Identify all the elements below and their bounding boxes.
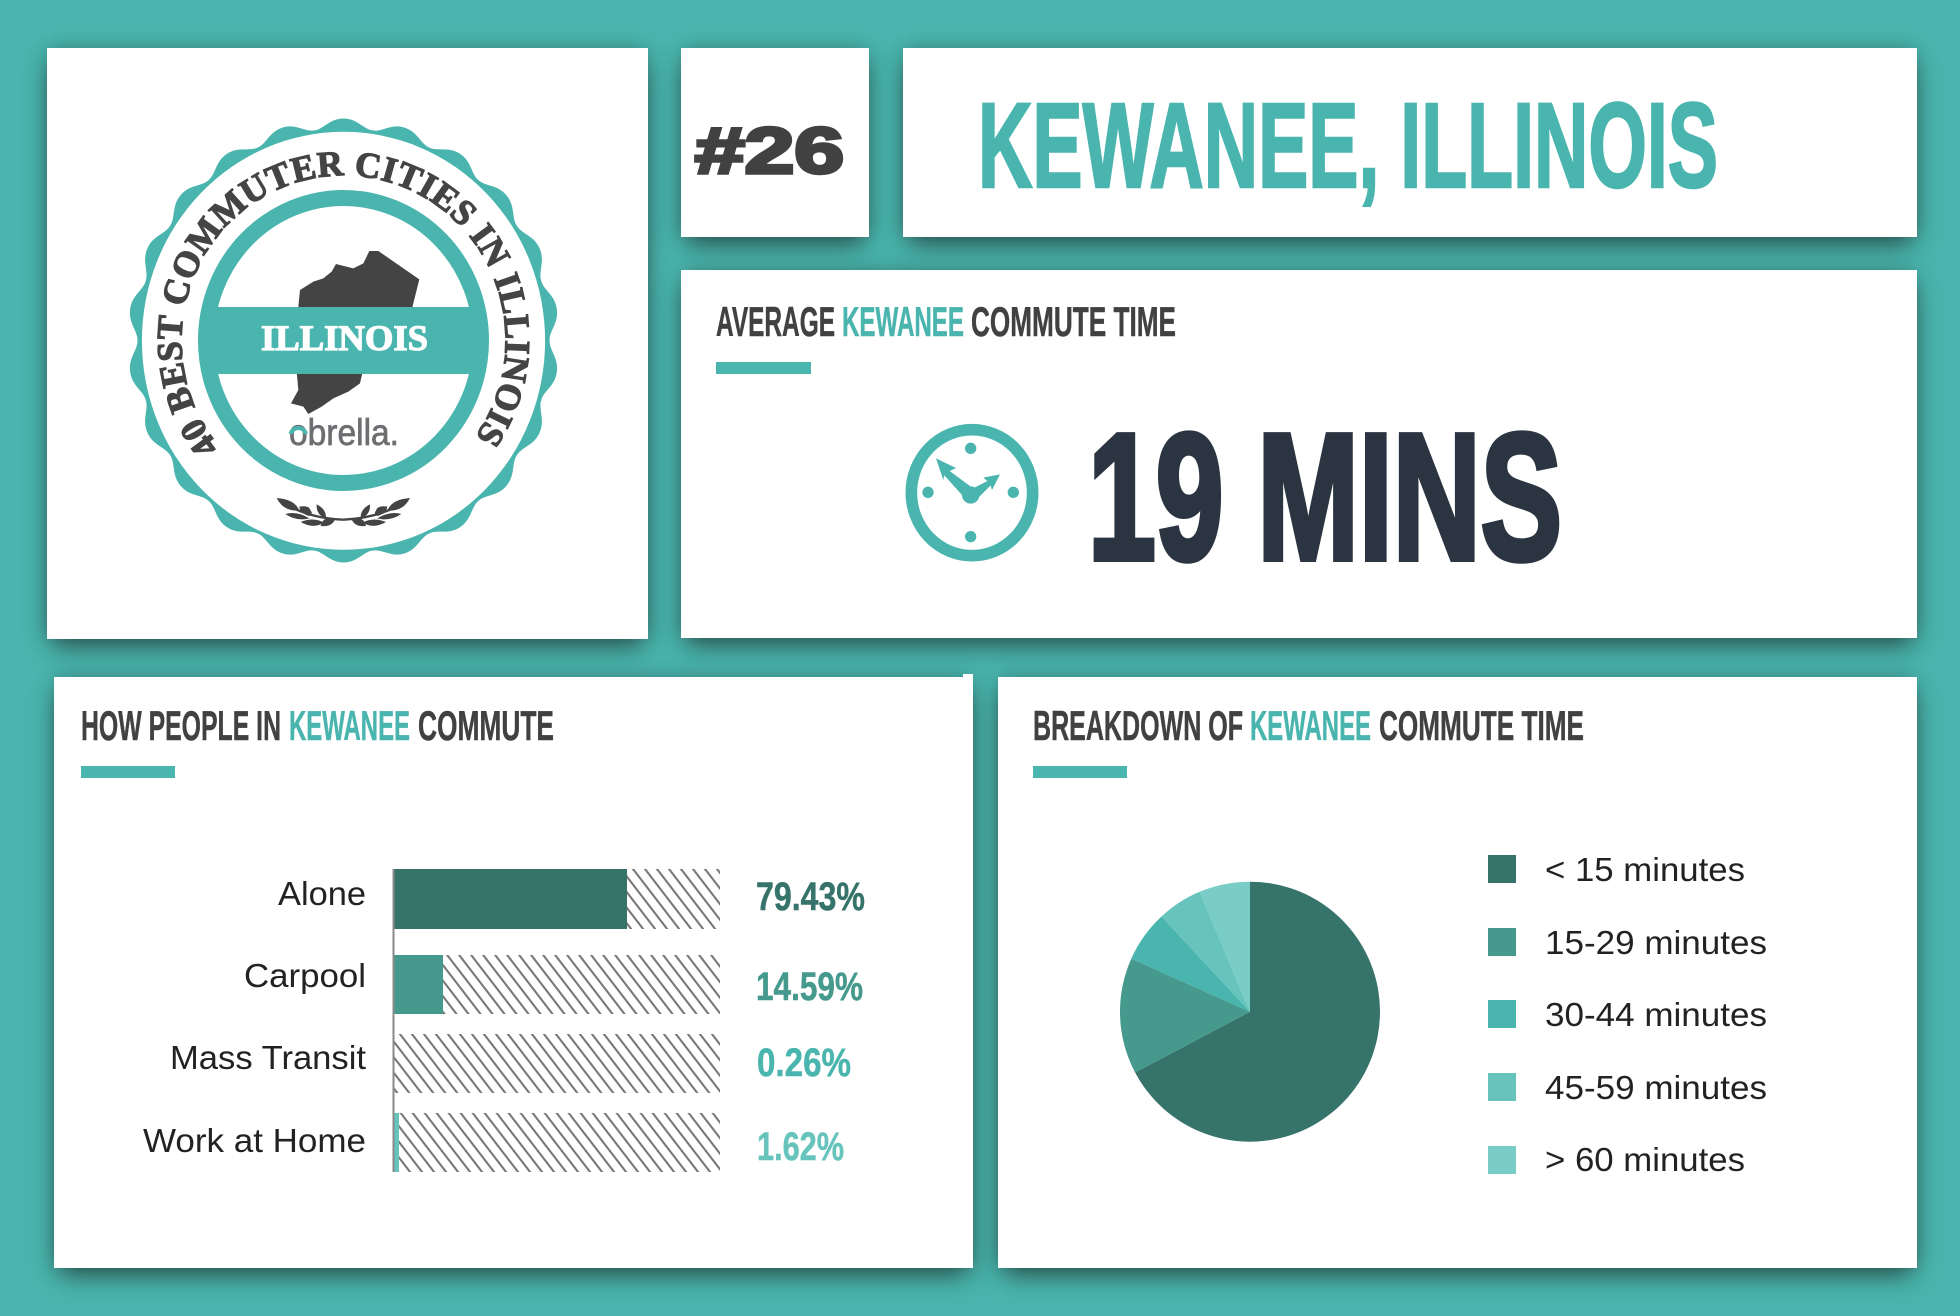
- heading: AVERAGE: [716, 298, 835, 345]
- heading: [716, 298, 1176, 345]
- row: Mass Transit: [170, 1034, 851, 1093]
- banner text: ILLINOIS: [261, 318, 428, 358]
- row: Alone: 79.43%: [756, 875, 865, 919]
- heading: COMMUTE TIME: [971, 298, 1176, 345]
- row: Carpool: [244, 955, 863, 1014]
- badge seal: [130, 118, 558, 562]
- row: Work at Home: [143, 1113, 844, 1172]
- row: Alone: Alone: [278, 875, 366, 912]
- notch: [963, 674, 973, 678]
- logo: obrella.: [289, 412, 399, 453]
- Illinois map: [291, 251, 419, 414]
- laurel: [277, 498, 410, 526]
- legend: 15-29 minutes: [1545, 924, 1767, 961]
- rank number: #26: [695, 114, 844, 187]
- heading accent: [716, 362, 811, 374]
- heading accent: [81, 766, 175, 778]
- inner ring: [206, 198, 481, 483]
- panel: average commute time: [681, 270, 1917, 638]
- heading accent: [1033, 766, 1127, 778]
- panel: title: [903, 48, 1917, 237]
- row: Mass Transit: 0.26%: [757, 1041, 851, 1085]
- big number: 19 MINS: [1088, 397, 1562, 598]
- row: Work at Home: 1.62%: [757, 1125, 844, 1169]
- legend: > 60 minutes: [1545, 1141, 1745, 1178]
- panel: commute time breakdown: [998, 677, 1917, 1268]
- bar chart: [143, 869, 865, 1172]
- panel: rank: [681, 48, 869, 237]
- legend: 30-44 minutes: [1545, 996, 1767, 1033]
- banner: [212, 307, 475, 374]
- heading: COMMUTE: [418, 702, 554, 749]
- legend: < 15 minutes: [1545, 851, 1745, 888]
- row: Mass Transit: Mass Transit: [170, 1039, 366, 1076]
- heading: KEWANEE: [1250, 702, 1371, 749]
- heading: HOW PEOPLE IN: [81, 702, 281, 749]
- heading: BREAKDOWN OF: [1033, 702, 1243, 749]
- legend: [1488, 851, 1767, 1178]
- heading: KEWANEE: [842, 298, 964, 345]
- icon: clock: [911, 430, 1033, 556]
- scalloped outer edge: [126, 119, 561, 562]
- row: Carpool: 14.59%: [756, 965, 863, 1009]
- row: Alone: [278, 869, 865, 929]
- row: Carpool: Carpool: [244, 957, 366, 994]
- legend: 45-59 minutes: [1545, 1069, 1767, 1106]
- heading: COMMUTE TIME: [1379, 702, 1584, 749]
- row: Work at Home: Work at Home: [143, 1122, 366, 1159]
- heading: [1033, 702, 1584, 749]
- circular slogan: 40 BEST COMMUTER CITIES IN ILLINOIS: [157, 152, 530, 452]
- pie chart: [1120, 882, 1380, 1142]
- heading: KEWANEE: [289, 702, 410, 749]
- panel: badge: [47, 48, 648, 639]
- panel: how people commute: [54, 677, 973, 1268]
